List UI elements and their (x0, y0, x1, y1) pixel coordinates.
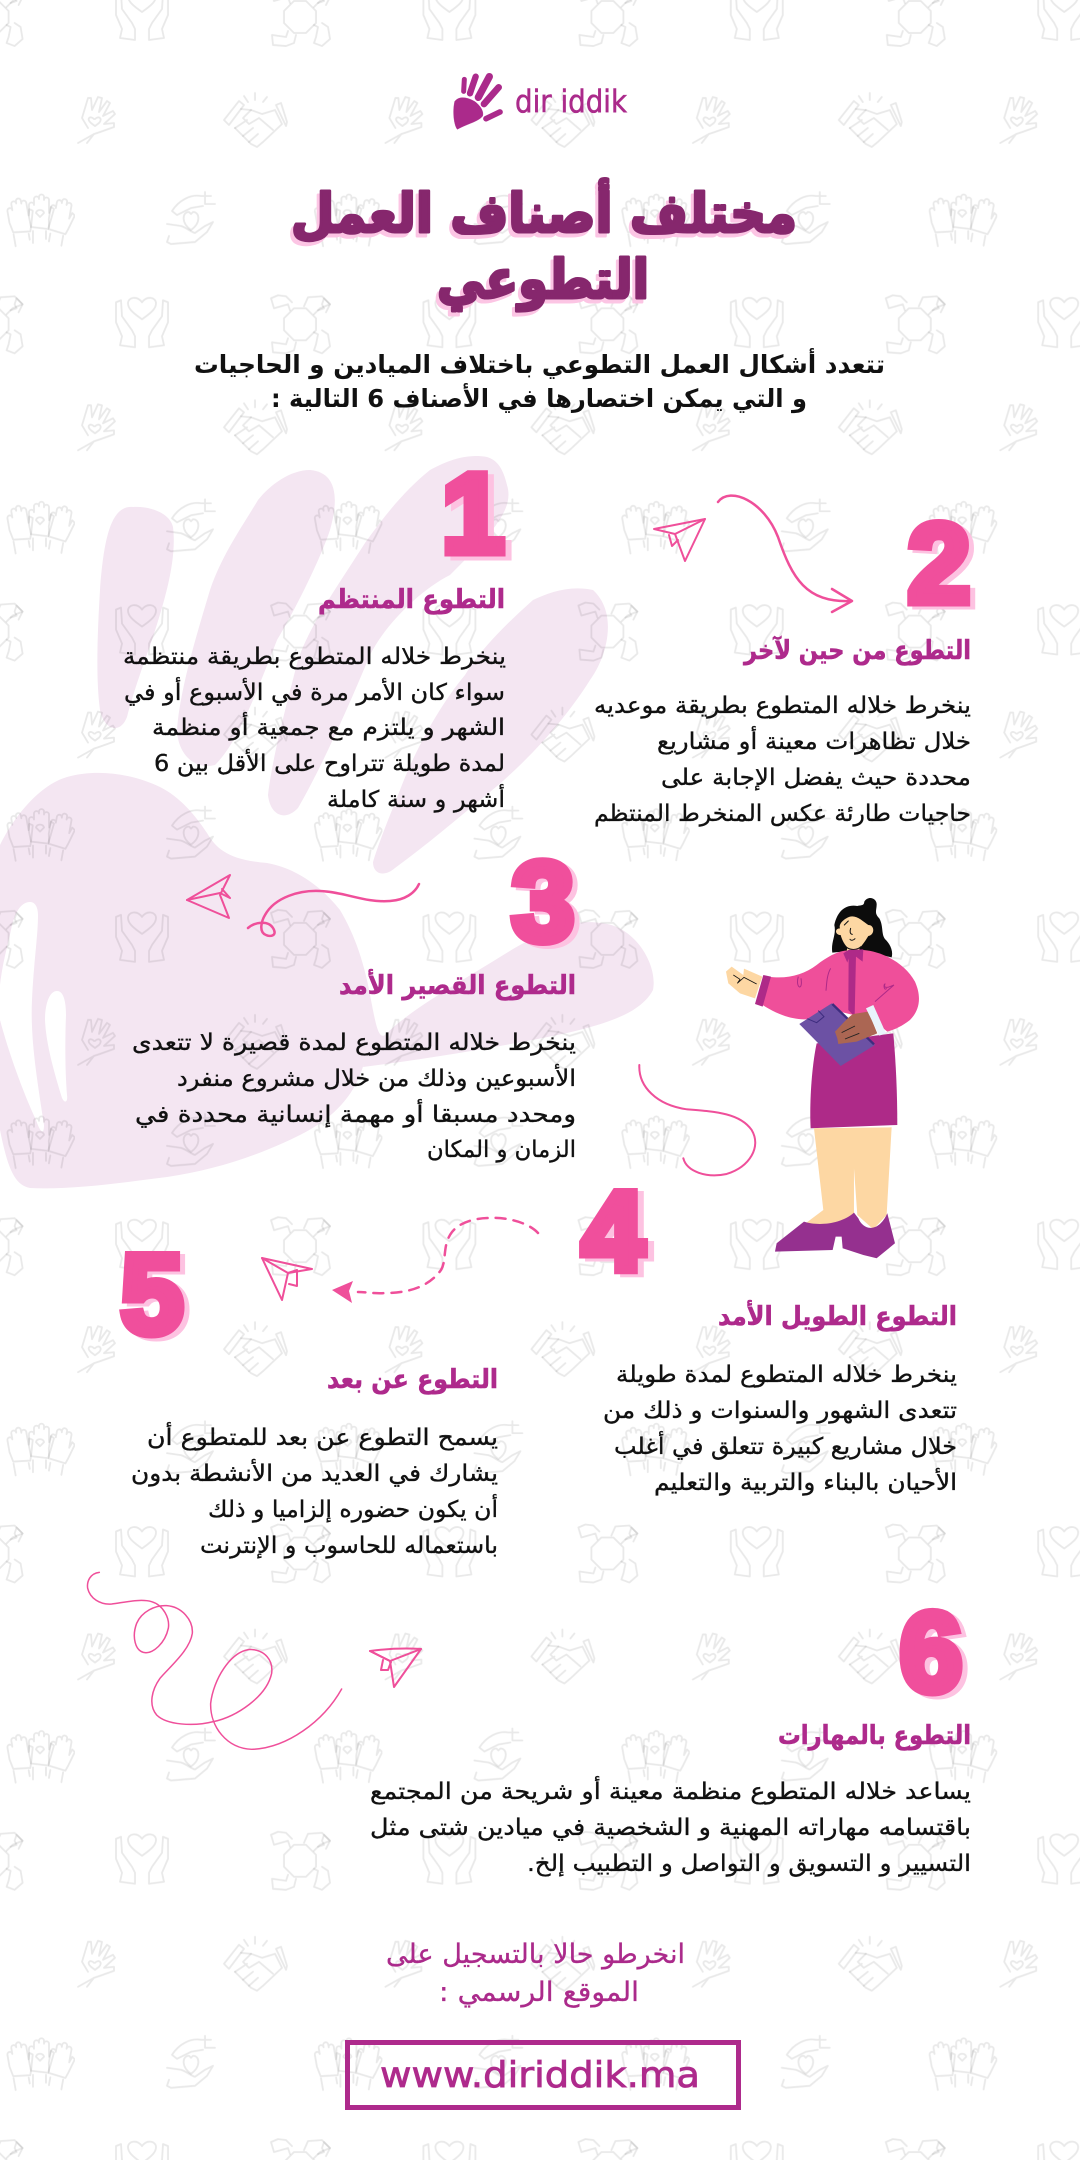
body 5: أن يكون حضوره إلزاميا و ذلك (208, 1494, 498, 1523)
subtitle: و التي يمكن اختصارها في الأصناف 6 التالية : (271, 383, 807, 414)
shoes (775, 1213, 895, 1258)
number 1: 1 (442, 451, 504, 576)
heading 3: التطوع القصير الأمد (339, 969, 576, 1001)
logo (454, 77, 627, 129)
title (288, 178, 797, 315)
body 3: ومحدد مسبقا أو مهمة إنسانية محددة في (135, 1099, 576, 1128)
panel: short-term volunteering (132, 839, 579, 1163)
heading 4: التطوع الطويل الأمد (718, 1300, 957, 1332)
body 5: باستعماله للحاسوب و الإنترنت (200, 1533, 498, 1559)
number 3: 3 (512, 839, 574, 964)
logo wordmark: dir iddik (515, 84, 627, 120)
call to action text: انخرطو حالا بالتسجيل على (386, 1939, 685, 1970)
title: مختلف أصناف العمل (288, 182, 794, 249)
number 5: 5 (126, 1235, 188, 1360)
body 4: تتعدى الشهور والسنوات و ذلك من (603, 1398, 957, 1424)
title: التطوعي (434, 252, 646, 315)
number 4: 4 (588, 1172, 650, 1297)
panel: regular volunteering (123, 451, 510, 813)
body 6: باقتسامه مهاراته المهنية و الشخصية في ميادين شتى مثل (370, 1815, 971, 1841)
number 1: 1 (448, 455, 510, 580)
clipboard (799, 1003, 875, 1066)
icon: paper plane 6 (370, 1649, 421, 1687)
skirt (810, 1033, 897, 1128)
heading 6: التطوع بالمهارات (778, 1721, 971, 1751)
body 1 (123, 644, 506, 813)
body 6 (370, 1776, 971, 1877)
illustration: woman with clipboard (726, 898, 919, 1258)
number 6: 6 (905, 1593, 967, 1718)
icon: paper plane 1 (654, 519, 705, 561)
number 3: 3 (517, 842, 579, 967)
legs (803, 1127, 892, 1229)
icon: paper plane 5 (262, 1258, 312, 1300)
body 3 (132, 1030, 576, 1163)
white cuff (866, 1005, 886, 1036)
face (836, 916, 873, 955)
body 3: الزمان و المكان (427, 1137, 576, 1163)
swirl line (87, 1572, 342, 1749)
face details (844, 921, 861, 949)
panel: long-term volunteering (582, 1169, 957, 1496)
subtitle (194, 348, 885, 414)
placket and collar (843, 949, 863, 1017)
number 4: 4 (582, 1169, 644, 1294)
body 1: ينخرط خلاله المتطوع بطريقة منتظمة (123, 644, 506, 670)
website button: www.diriddik.ma (380, 2055, 700, 2096)
body 4: الأحيان بالبناء والتربية والتعليم (654, 1468, 957, 1496)
website button (348, 2042, 738, 2108)
curve near woman (639, 1065, 755, 1175)
arrow: dashed curve to plane 5 (332, 1218, 538, 1303)
palm highlights (0, 902, 67, 1131)
arrow: curve to number 2 (718, 496, 852, 612)
body 2: ينخرط خلاله المتطوع بطريقة موعديه (594, 693, 971, 719)
hair (832, 898, 892, 957)
call to action text (386, 1939, 685, 2008)
body 1: لمدة طويلة تتراوح على الأقل بين 6 (154, 749, 505, 777)
icon: logo hand (454, 77, 500, 129)
body 5: يشارك في العديد من الأنشطة بدون (131, 1459, 498, 1487)
subtitle: تتعدد أشكال العمل التطوعي باختلاف الميادين و الحاجيات (194, 348, 885, 380)
body 1: سواء كان الأمر مرة في الأسبوع أو في (124, 677, 505, 706)
icon: paper plane 3 (187, 875, 230, 918)
raised hand (726, 967, 762, 998)
body 1: أشهر و سنة كاملة (327, 784, 505, 813)
holding hand (835, 1012, 877, 1044)
panel: occasional volunteering (594, 501, 975, 827)
body 1: الشهر و يلتزم مع جمعية أو منظمة (152, 712, 505, 741)
shirt (760, 950, 919, 1032)
panel: remote volunteering (121, 1232, 498, 1559)
body 5: يسمح التطوع عن بعد للمتطوع أن (147, 1422, 498, 1451)
arrow: looped curve 3 (248, 884, 419, 936)
heading 5: التطوع عن بعد (327, 1365, 498, 1395)
sleeve creases (798, 968, 894, 1002)
body 2: حاجيات طارئة عكس المنخرط المنتظم (594, 801, 971, 827)
body 5 (131, 1422, 498, 1559)
body 2: محددة حيث يفضل الإجابة على (661, 765, 971, 791)
heading 1: التطوع المنتظم (318, 585, 505, 615)
body 6: التسيير و التسويق و التواصل و التطبيب إلخ. (527, 1851, 971, 1877)
number 5: 5 (121, 1232, 183, 1357)
number 2: 2 (913, 504, 975, 629)
decorative hand silhouette (0, 456, 654, 1188)
call to action text: الموقع الرسمي : (439, 1977, 639, 2008)
heading 2: التطوع من حين لآخر (742, 635, 971, 666)
body 3: ينخرط خلاله المتطوع لمدة قصيرة لا تتعدى (132, 1030, 576, 1056)
panel: skills volunteering (370, 1590, 971, 1877)
title: التطوعي (437, 248, 649, 311)
body 4: خلال مشاريع كبيرة تتعلق في أغلب (614, 1431, 957, 1460)
body 6: يساعد خلاله المتطوع منظمة معينة أو شريحة من المجتمع (370, 1776, 971, 1805)
body 2 (594, 693, 971, 827)
body 4 (603, 1362, 957, 1496)
body 3: الأسبوعين وذلك من خلال مشروع منفرد (177, 1064, 576, 1092)
cuff (755, 975, 771, 1007)
body 2: خلال تظاهرات معينة أو مشاريع (657, 726, 971, 755)
number 2: 2 (908, 501, 970, 626)
number 6: 6 (900, 1590, 962, 1715)
body 4: ينخرط خلاله المتطوع لمدة طويلة (616, 1362, 957, 1388)
title: مختلف أصناف العمل (291, 178, 797, 245)
